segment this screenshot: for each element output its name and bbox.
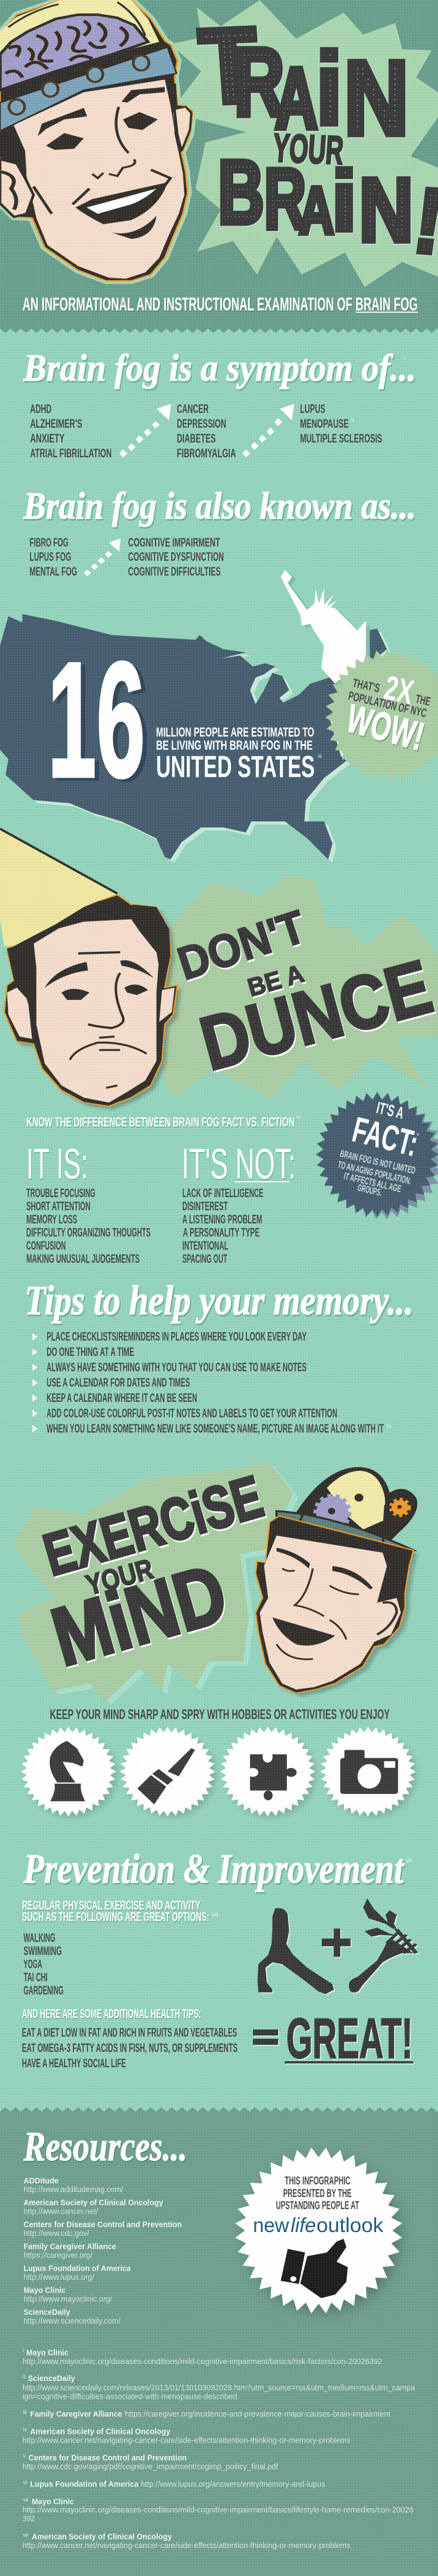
physical exercise intro [22,1898,218,1924]
footnote references: http://www.cancer.net/navigating-cancer-care/side-effects/attention-thinking-or-memory-problems [22,2436,350,2445]
it is list: CONFUSION [26,1239,66,1252]
footnote references: ii [23,2374,25,2380]
resource list: American Society of Clinical Oncology [24,2198,164,2207]
it is list: DIFFICULTY ORGANIZING THOUGHTS [26,1226,151,1239]
footnote references: iv [23,2427,27,2433]
statue of liberty silhouette [281,570,370,686]
title: train your brain: R [234,28,285,136]
footnote mark vii: vii [406,1856,412,1864]
activity list: YOGA [24,1957,42,1971]
footnote references: v [23,2453,26,2459]
badge: it's a fact: IT'S A [374,1099,406,1123]
title: exercise your mind: EXERCiSE [37,1463,270,1588]
it's not list: LACK OF INTELLIGENCE [182,1186,263,1200]
equals great [253,2007,413,2071]
resource list: Lupus Foundation of America [24,2264,131,2273]
symptom list column 3: ii [351,417,354,423]
footnote references: Centers for Disease Control and Prevention [28,2453,187,2463]
icon: camera [320,1727,419,1820]
health tips list: EAT OMEGA-3 FATTY ACIDS IN FISH, NUTS, OR SUPPLEMENTS [22,2041,238,2055]
title: train your brain: B [218,142,264,243]
arrow 2 [243,404,294,457]
resource list: http://www.cancer.net/ [24,2207,99,2216]
symptom list column 2: FIBROMYALGIA [177,446,236,460]
memory tips list: KEEP A CALENDAR WHERE IT CAN BE SEEN [47,1391,197,1405]
title: train your brain: A [275,50,318,146]
header starburst [170,0,438,287]
it is list [26,1186,151,1266]
arrow 1 [119,404,171,457]
sixteen million caption: iii [318,754,322,760]
symptom list column 1: ADHD [30,402,51,416]
fact vs fiction line [26,1114,301,1130]
physical exercise intro: REGULAR PHYSICAL EXERCISE AND ACTIVITY [22,1898,200,1912]
title: train your brain: N [344,39,408,157]
it's not list: INTENTIONAL [182,1239,228,1252]
icon: chess knight [21,1727,119,1820]
resource list: https://caregiver.org/ [24,2251,93,2260]
dunce starburst [162,874,438,1099]
big number 16: 16 [48,628,145,812]
footnote references: http://www.mayoclinic.org/diseases-conditions/mild-cognitive-impairment/basics/risk-factors/con-20026392 [22,2357,382,2366]
it's not list [182,1186,263,1266]
footnote references: vii [23,2532,28,2538]
also-known-as list column 2: COGNITIVE IMPAIRMENT [128,536,220,549]
heading: it is: IT IS: [26,1140,88,1188]
also-known-as list column 1: MENTAL FOG [30,565,77,578]
footnote references: http://www.lupus.org/answers/entry/memory-and-lupus [141,2480,325,2489]
icon: fork with vegetable [349,1899,416,1993]
arrow 3 [84,538,120,576]
footnote references: Family Caregiver Alliance [30,2410,122,2419]
footnote mark i: i [404,355,405,360]
badge: 2x population of nyc wow: THAT'S [351,676,381,695]
symptom list column 2: CANCER [177,402,209,416]
also-known-as list column 2: COGNITIVE DIFFICULTIES [128,565,221,578]
footnote references: http://www.sciencedaily.com/releases/2013/01/130103092028.htm?utm_source=rss&utm_medium=rss&utm_campa [22,2383,416,2393]
title: don't be a dunce: BE A [244,959,307,1002]
activity list: WALKING [24,1931,55,1945]
symptom list column 2: DEPRESSION [177,417,226,430]
footnote references: http://www.mayoclinic.org/diseases-conditions/mild-cognitive-impairment/basics/lifestyle-home-remedies/con-20026 [22,2505,413,2515]
presenter badge: life [291,2214,316,2236]
footnote references: ScienceDaily [28,2374,76,2383]
title: don't be a dunce: DON'T [172,900,312,990]
title: train your brain: R [264,151,307,247]
footnote references: Lupus Foundation of America [30,2480,139,2489]
title: train your brain: YOUR [272,125,345,173]
also-known-as list column 1: LUPUS FOG [30,550,71,564]
footer zigzag edge [0,2107,438,2112]
health tips list [22,2026,238,2070]
title: train your brain: i [316,31,343,146]
activity list [24,1931,64,1997]
footnote references: http://www.cancer.net/navigating-cancer-care/side-effects/attention-thinking-or-memory-problems [22,2541,350,2550]
sixteen million caption: UNITED STATES [156,749,315,784]
it's not list: A LISTENING PROBLEM [182,1212,262,1226]
memory tips list [32,1330,391,1435]
title: exercise your mind: YOUR [83,1553,157,1602]
presenter badge: PRESENTED BY THE [283,2187,351,2200]
resource list: ScienceDaily [24,2308,71,2317]
physical exercise intro: viii [211,1912,218,1918]
it is list: MAKING UNUSUAL JUDGEMENTS [26,1252,140,1266]
resource list: ADDitude [24,2176,59,2186]
symptom list column 1 [30,402,112,460]
badge: 2x population of nyc wow: 2X [381,669,417,712]
resource list [24,2176,182,2326]
fact vs fiction line: iv [297,1114,301,1120]
resource list: http://www.additudemag.com/ [24,2185,124,2194]
symptom list column 1: ANXIETY [30,432,65,445]
presenter badge: new [253,2214,289,2236]
activity list: SWIMMING [24,1944,62,1958]
it is list: TROUBLE FOCUSING [26,1186,95,1200]
sixteen million caption: MILLION PEOPLE ARE ESTIMATED TO [156,725,314,740]
symptom list column 2 [177,402,236,460]
memory tips list: DO ONE THING AT A TIME [47,1345,134,1359]
footnote references: vii [23,2497,28,2503]
resource list: Mayo Clinic [24,2286,66,2295]
resource list: http://www.sciencedaily.com/ [24,2316,121,2326]
it is list: MEMORY LOSS [26,1212,77,1226]
heading: resources: Resources... [23,2124,187,2170]
header zigzag edge [0,329,438,333]
title: train your brain: i [331,153,358,249]
footnote references: American Society of Clinical Oncology [30,2427,171,2436]
footnote references: American Society of Clinical Oncology [32,2532,172,2542]
footnote references: 392 [22,2514,35,2523]
resource list: http://www.cdc.gov/ [24,2229,90,2238]
symptom list column 2: DIABETES [177,432,216,445]
resource list: http://www.lupus.org/ [24,2273,95,2282]
footnote references [22,2348,416,2550]
illustration: man with gears in head [256,1467,418,1697]
title: train your brain: N [359,160,413,261]
footnote references: https://caregiver.org/incidence-and-prevalence-major-causes-brain-impairment [125,2410,391,2419]
symptom list column 1: ALZHEIMER'S [30,417,82,430]
sixteen million caption: BE LIVING WITH BRAIN FOG IN THE [156,738,313,753]
activity list: TAI CHI [24,1970,48,1984]
activity list: GARDENING [24,1983,64,1997]
resource list: http://www.mayoclinic.org/ [24,2295,113,2304]
icon: paint brush [120,1727,218,1820]
presenter badge: THIS INFOGRAPHIC [285,2175,350,2187]
footnote references: ign=cognitive-difficulties-associated-with-menopause-described [22,2392,237,2401]
symptom list column 3: MULTIPLE SCLEROSIS [300,432,382,445]
also-known-as list column 2: COGNITIVE DYSFUNCTION [128,550,224,564]
also-known-as list column 1: FIBRO FOG [30,536,68,549]
health tips list: EAT A DIET LOW IN FAT AND RICH IN FRUITS AND VEGETABLES [22,2026,237,2039]
presenter badge: outlook [316,2214,384,2236]
it is list: SHORT ATTENTION [26,1199,90,1213]
footnote references: iii [23,2410,27,2416]
symptom list column 1: ATRIAL FIBRILLATION [30,446,112,460]
title: exercise your mind [37,1463,270,1683]
symptom list column 3: LUPUS [300,402,325,416]
physical exercise intro: SUCH AS THE FOLLOWING ARE GREAT OPTIONS: [22,1910,209,1924]
footnote references: vi [23,2480,27,2486]
icon: plus sign [322,1929,350,1957]
presenter badge [228,2140,410,2321]
also-known-as list column 2 [128,536,224,578]
symptom list column 3 [300,402,382,445]
resource list: Family Caregiver Alliance [24,2242,116,2251]
exercise starburst [13,1461,298,1705]
it's not list: A PERSONALITY TYPE [183,1226,260,1239]
footer background [0,2112,438,2576]
memory tips list: USE A CALENDAR FOR DATES AND TIMES [47,1376,190,1389]
badge: it's a fact: GROUPS. [356,1182,383,1198]
badge: it's a fact: v [417,1131,419,1137]
icon: puzzle piece [220,1727,319,1820]
it's not list: SPACING OUT [182,1252,227,1266]
memory tips list: vi [387,1423,391,1430]
sixteen million caption [156,725,322,784]
title: exercise your mind: MiND [43,1546,236,1683]
also-known-as list column 1 [30,536,77,578]
health tips heading: AND HERE ARE SOME ADDITIONAL HEALTH TIPS: [22,2006,201,2021]
footnote references: Mayo Clinic [32,2497,74,2506]
presenter badge: UPSTANDING PEOPLE AT [276,2199,359,2212]
footnote references: Mayo Clinic [26,2348,68,2358]
health tips list: HAVE A HEALTHY SOCIAL LIFE [22,2056,126,2070]
footnote references: i [23,2348,24,2354]
icon: walking woman [257,1908,334,1994]
resource list: Centers for Disease Control and Prevention [24,2220,182,2229]
it's not list: DISINTEREST [182,1199,228,1213]
illustration: sad man in dunce cap [0,829,181,1109]
header background [0,0,438,329]
footnote references: http://www.cdc.gov/aging/pdf/cognitive_impairment/cogimp_poilicy_final.pdf [22,2462,279,2471]
symptom list column 3: MENOPAUSE [300,417,349,430]
heading: it's not: IT'S NOT: [182,1140,296,1188]
map of the united states [0,614,391,868]
badge: 2x population of nyc wow [317,640,438,790]
title: train your brain: A [299,173,334,248]
illustration: smiling man with exposed brain [0,0,193,281]
title: train your brain [196,5,438,274]
title: train your brain: T [196,5,262,127]
badge: it's a fact [314,1089,438,1225]
